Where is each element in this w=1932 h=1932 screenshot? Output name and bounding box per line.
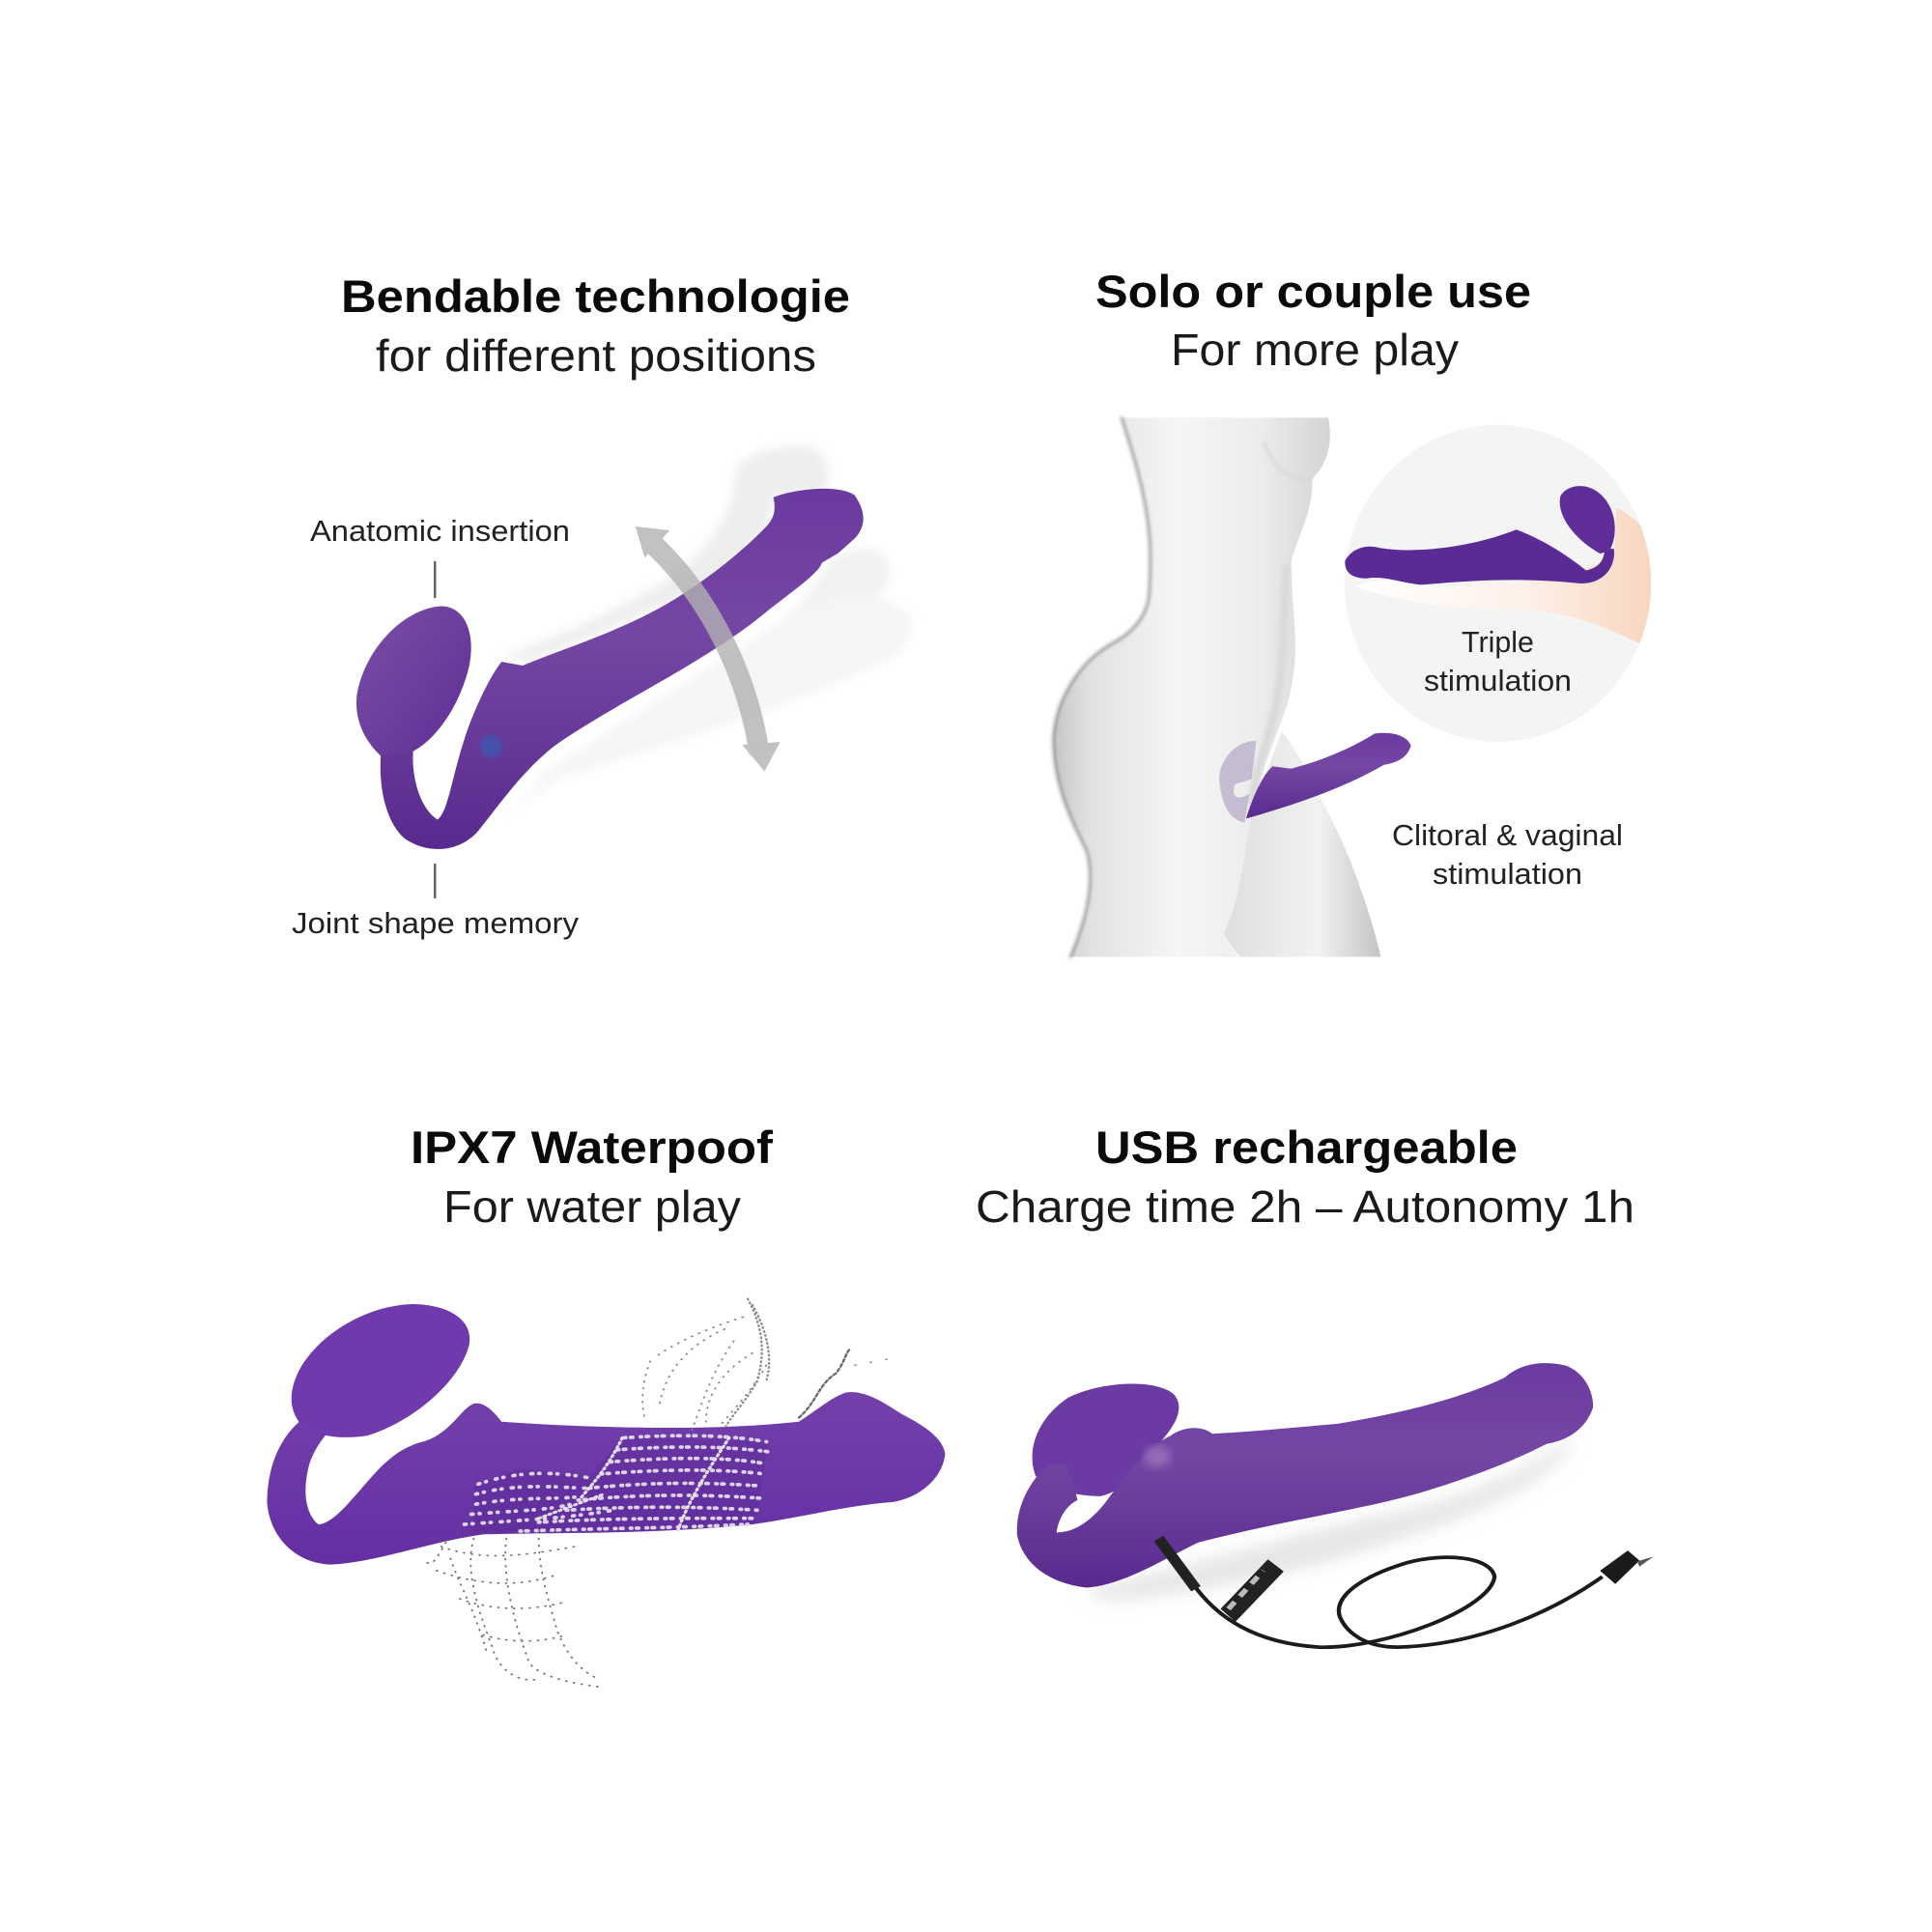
product body [1017,1363,1593,1587]
product body [267,1392,945,1565]
charging cable [1194,1557,1603,1647]
water spray bottom [427,1539,604,1688]
inset circle [1345,425,1651,742]
label: stimulation: stimulation [1433,857,1582,891]
panel: bendable technology [292,270,911,940]
anatomic bulb [292,1304,469,1437]
hand holding product [1355,508,1658,649]
product body [381,489,864,849]
illustration: mannequin with product [1053,417,1658,957]
product external part [1246,733,1411,818]
label: stimulation: stimulation [1424,664,1572,697]
label: triple: Triple [1462,625,1534,659]
leader line: anatomic insertion [434,561,437,598]
product translucent inner part [1219,741,1256,822]
panel: solo or couple use [1053,266,1658,957]
subheading: for more play: For more play [1171,325,1459,375]
label: anatomic insertion: Anatomic insertion [310,514,570,548]
water spray top [642,1299,887,1430]
subheading: for different positions: for different positions [376,330,816,381]
product illustration with motion ghosts and arrow [356,446,911,849]
label: clitoral and vaginal: Clitoral & vaginal [1392,818,1623,852]
leader line: joint shape memory [434,864,437,898]
connector tag [1220,1559,1284,1622]
heading: solo or couple use: Solo or couple use [1095,266,1531,317]
anatomic bulb [1033,1383,1179,1496]
double-headed bending arrow [636,526,781,771]
soft shadow [1082,1435,1575,1601]
blue sensor dot [480,734,502,757]
illustration: product with water splash [267,1299,945,1688]
usb plug tip [1637,1556,1654,1567]
water droplets on body [465,1435,769,1531]
usb plug [1600,1550,1639,1584]
cable connector [1159,1539,1196,1589]
product in inset [1345,529,1614,584]
illustration: product with usb cable [1017,1363,1654,1647]
heading: usb rechargeable: USB rechargeable [1095,1122,1518,1173]
heading: bendable technologie: Bendable technologie [341,270,850,322]
body contour shading [1053,417,1312,957]
highlight [1145,1445,1171,1468]
motion ghost shapes [501,446,911,816]
hole [1057,1496,1103,1532]
anatomic bulb [356,607,471,755]
panel: waterproof [267,1122,945,1688]
subheading: for water play: For water play [443,1181,741,1232]
tag highlight [1229,1571,1264,1609]
heading: ipx7 waterpoof: IPX7 Waterpoof [411,1122,773,1173]
panel: usb rechargeable [976,1122,1654,1647]
mannequin back leg [1224,731,1380,957]
mannequin torso and front leg [1053,417,1330,957]
subheading: charge time and autonomy: Charge time 2h – Autonomy 1h [976,1181,1634,1232]
label: joint shape memory: Joint shape memory [292,906,580,940]
wet band tint [473,1435,769,1532]
bulb in inset [1560,486,1615,554]
